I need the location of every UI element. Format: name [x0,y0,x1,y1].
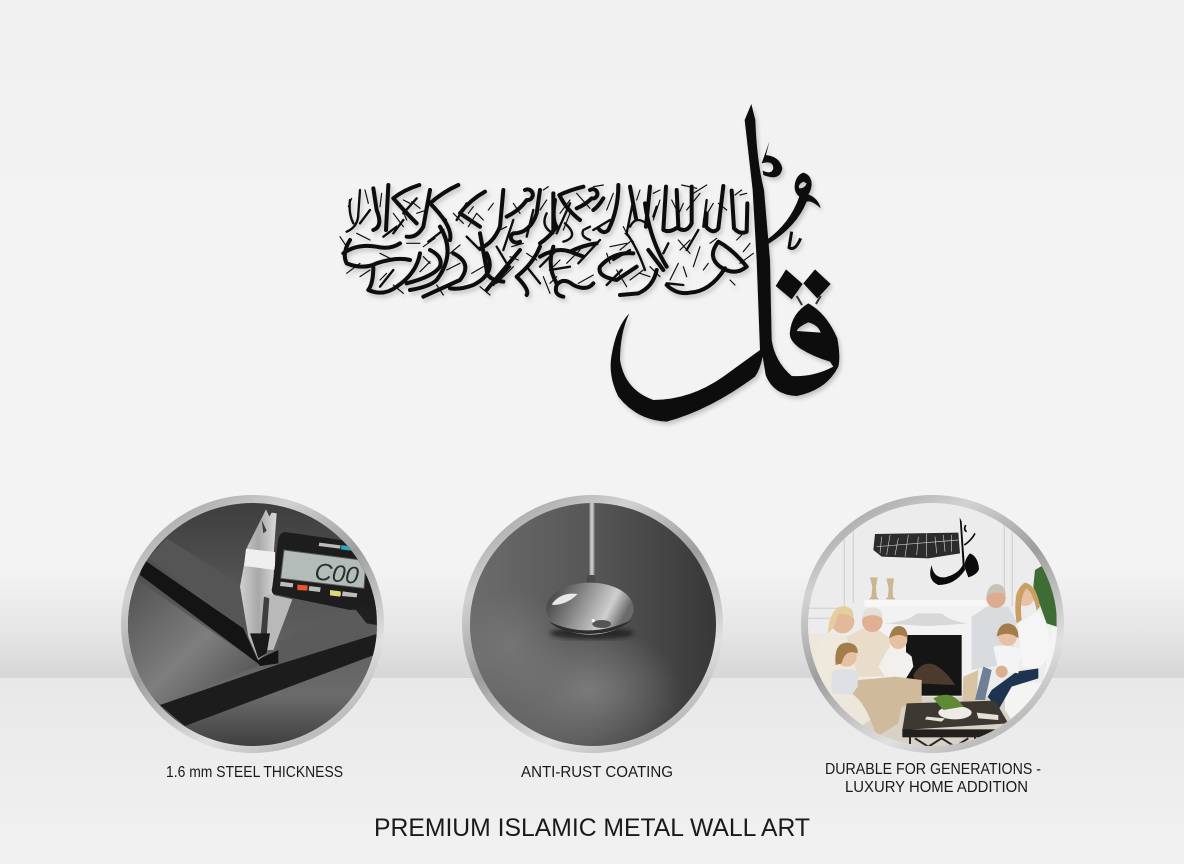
inscription: left half [340,185,560,297]
metal calligraphy wall art [340,104,839,422]
chrome ring [801,495,1064,753]
caliper jaws [240,509,277,660]
water droplet photo [470,503,716,746]
chrome ring [462,495,723,753]
durable caption [825,761,1041,796]
badge: steel thickness [120,495,384,753]
adult group right [972,607,1017,670]
heads left [833,614,854,634]
durable caption: LUXURY HOME ADDITION [845,779,1028,796]
floor [0,678,1184,864]
title: PREMIUM ISLAMIC METAL WALL ART [374,814,810,842]
upper loop, waw and mark [762,142,821,249]
caliper and steel photo [120,500,383,750]
inscription: right half [540,185,753,297]
plant [1033,565,1057,627]
display readout: C00 [313,558,361,590]
heads right [986,592,1006,608]
wall background [0,0,1184,678]
mantel and fireplace [864,600,988,607]
miniature calligraphy [873,517,979,585]
qaf diamonds [776,269,831,299]
durable caption: DURABLE FOR GENERATIONS - [825,761,1041,778]
anti-rust caption: ANTI-RUST COATING [521,764,673,781]
adult group left [817,634,856,696]
digital display body [272,532,377,610]
candle holders [869,577,896,599]
badge: durable family scene [801,495,1064,753]
floor and sofas [863,696,1011,746]
chrome ring [121,495,384,753]
steel thickness caption: 1.6 mm STEEL THICKNESS [166,764,343,781]
family living room photo [802,500,1062,750]
large letters: qaf and lam with bowl [611,104,839,422]
coffee table [902,701,1008,730]
badge: anti-rust coating [455,495,723,753]
